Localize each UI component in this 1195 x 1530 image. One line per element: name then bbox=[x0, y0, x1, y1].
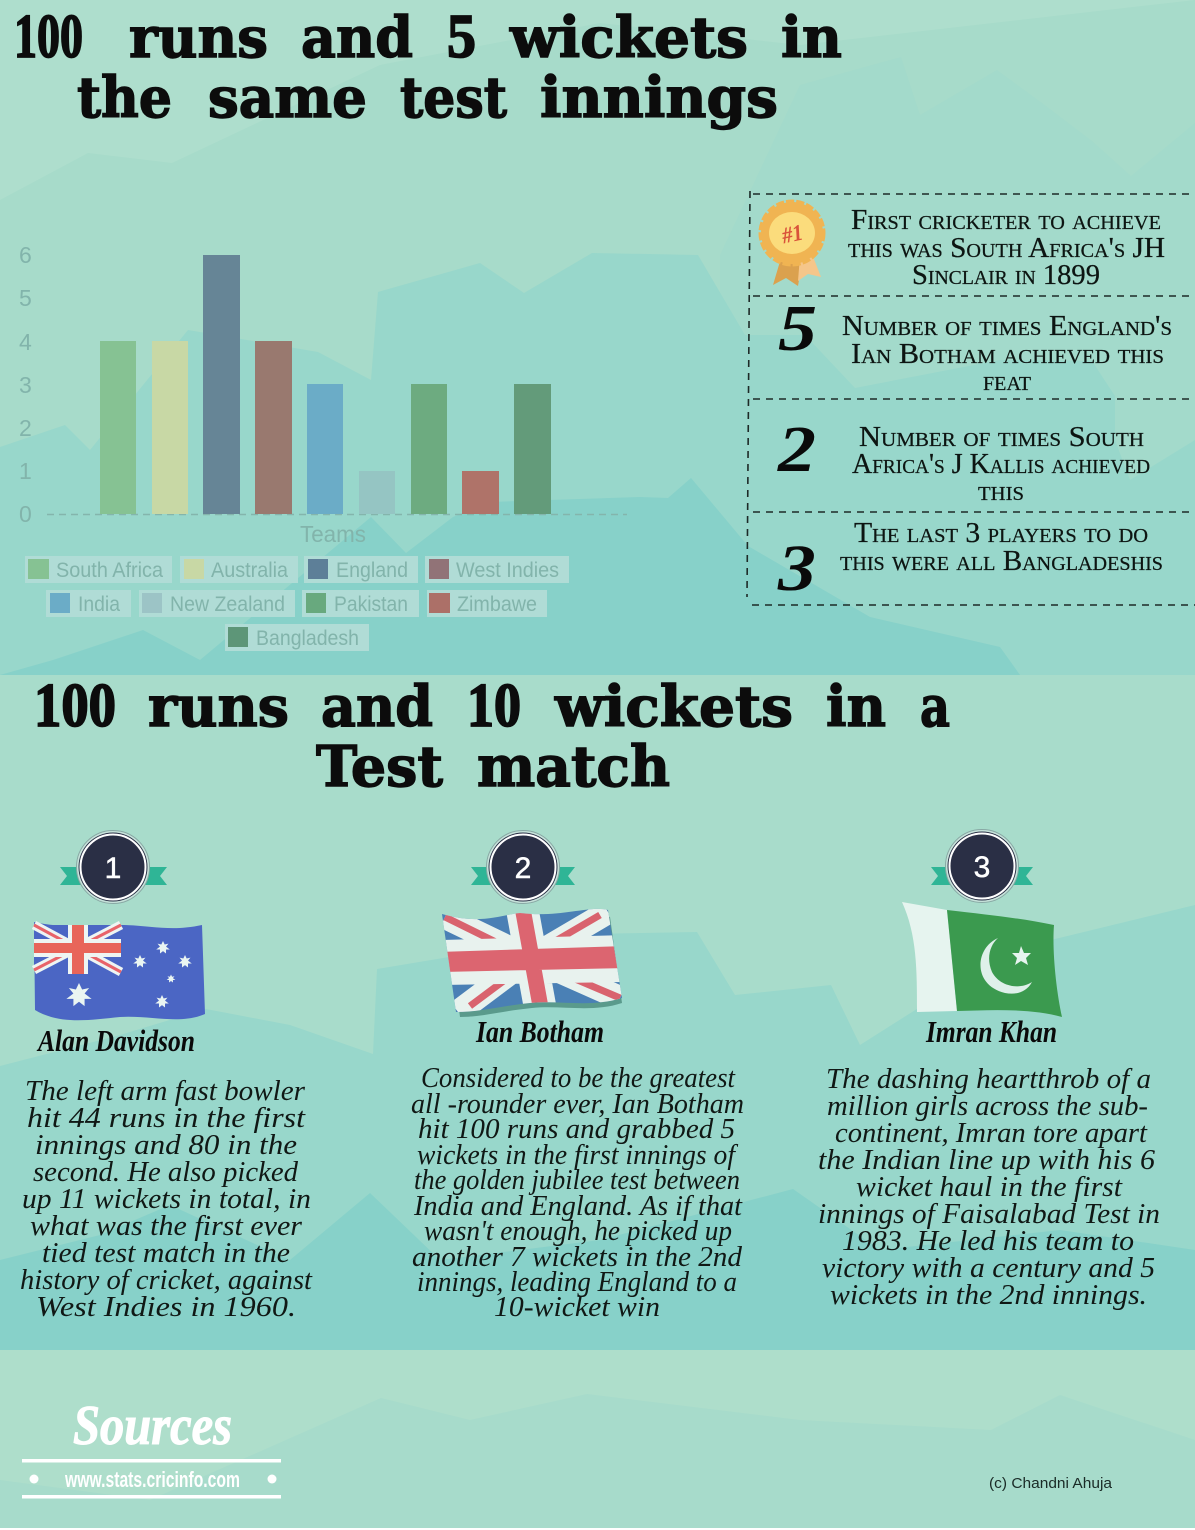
title: 100 runs and 10 wickets: and bbox=[321, 674, 433, 740]
fact: Botham: Ian Botham achieved this bbox=[851, 338, 1164, 370]
flag: Australia bbox=[34, 922, 205, 1020]
bio: Alan Davidson: history of cricket, against bbox=[20, 1264, 313, 1296]
name: Alan Davidson: Alan Davidson bbox=[36, 1023, 195, 1058]
bio: Alan Davidson: The left arm fast bowler bbox=[25, 1075, 306, 1107]
legend: South Africa bbox=[56, 559, 163, 582]
badge 3 bbox=[931, 830, 1033, 902]
title: 100 runs and 5 wickets bbox=[14, 3, 842, 131]
dashed dividers bbox=[747, 191, 1195, 605]
bar chart: achievements by team bbox=[19, 242, 627, 651]
bio: Ian Botham bbox=[411, 1062, 744, 1323]
source rules and url: www.stats.cricinfo.com bbox=[64, 1467, 240, 1492]
icon: medal #1: #1 bbox=[779, 220, 805, 249]
bio: Ian Botham: innings, leading England to a bbox=[417, 1266, 737, 1298]
badge 2 bbox=[471, 830, 575, 904]
bio: Imran Khan: continent, Imran tore apart bbox=[835, 1117, 1148, 1149]
title: 100 runs and 10 wickets: in bbox=[826, 674, 886, 740]
bio: Alan Davidson: what was the first ever bbox=[30, 1210, 303, 1242]
legend: Pakistan bbox=[334, 593, 408, 616]
title: 100 runs and 5 wickets: same bbox=[208, 65, 367, 131]
fact: Bangladeshis: The last 3 players to do bbox=[854, 517, 1148, 549]
title: 100 runs and 10 wickets: a bbox=[920, 674, 950, 740]
title: 100 runs and 5 wickets: 100 bbox=[14, 3, 83, 71]
bio: Imran Khan: million girls across the sub- bbox=[827, 1090, 1148, 1122]
fact: Kallis: this bbox=[978, 475, 1024, 507]
y axis labels: 2 bbox=[19, 415, 32, 441]
number 2: 2 bbox=[777, 413, 816, 486]
bio: Alan Davidson: tied test match in the bbox=[42, 1237, 290, 1269]
y axis labels bbox=[19, 242, 32, 527]
fact: Kallis: Africa's J Kallis achieved bbox=[852, 448, 1150, 480]
bio: Ian Botham: hit 100 runs and grabbed 5 bbox=[418, 1113, 735, 1145]
badge 2: 2 bbox=[515, 852, 531, 885]
title: 100 runs and 5 wickets: wickets bbox=[509, 5, 748, 71]
y axis labels: 5 bbox=[19, 285, 32, 311]
bio: Imran Khan: the Indian line up with his 6 bbox=[818, 1144, 1156, 1176]
bio: Imran Khan: wicket haul in the first bbox=[856, 1171, 1123, 1203]
title: 100 runs and 5 wickets: 5 bbox=[447, 3, 476, 71]
bio: Imran Khan: victory with a century and 5 bbox=[822, 1252, 1155, 1284]
sources heading: Sources bbox=[73, 1395, 232, 1457]
name: Ian Botham: Ian Botham bbox=[475, 1014, 604, 1049]
baseline bbox=[47, 514, 627, 516]
sources block bbox=[22, 1395, 281, 1498]
bio: Ian Botham: wasn't enough, he picked up bbox=[424, 1215, 732, 1247]
bio: Ian Botham: another 7 wickets in the 2nd bbox=[412, 1241, 742, 1273]
bio: Imran Khan bbox=[818, 1063, 1160, 1311]
y axis labels: 0 bbox=[19, 501, 32, 527]
legend bbox=[25, 556, 569, 651]
fact: Botham: feat bbox=[983, 365, 1031, 397]
flag: United Kingdom bbox=[440, 905, 625, 1017]
bars bbox=[100, 255, 551, 514]
badge 1 bbox=[60, 830, 167, 904]
title: 100 runs and 10 wickets: 10 bbox=[467, 672, 521, 740]
badge 3: 3 bbox=[974, 851, 990, 884]
title: 100 runs and 10 wickets: runs bbox=[148, 674, 289, 740]
bio: Ian Botham: India and England. As if that bbox=[413, 1190, 743, 1222]
fact: first cricketer: this was South Africa's JH bbox=[848, 232, 1165, 264]
y axis labels: 3 bbox=[19, 372, 32, 398]
bio: Imran Khan: wickets in the 2nd innings. bbox=[830, 1279, 1147, 1311]
number 5: 5 bbox=[778, 292, 817, 365]
bio: Imran Khan: 1983. He led his team to bbox=[842, 1225, 1134, 1257]
fact: first cricketer bbox=[848, 204, 1165, 291]
bio: Ian Botham: wickets in the first innings of bbox=[417, 1139, 739, 1171]
title: 100 runs and 10 wickets: match bbox=[477, 734, 670, 800]
number 3: 3 bbox=[777, 532, 816, 605]
y axis labels: 1 bbox=[19, 458, 32, 484]
bio: Ian Botham: the golden jubilee test between bbox=[414, 1164, 740, 1196]
y axis labels: 6 bbox=[19, 242, 32, 268]
bio: Alan Davidson: second. He also picked bbox=[33, 1156, 298, 1188]
icon: medal #1 bbox=[761, 202, 823, 286]
bio: Alan Davidson: hit 44 runs in the first bbox=[27, 1102, 306, 1134]
legend: India bbox=[78, 593, 120, 616]
title: 100 runs and 5 wickets: test bbox=[400, 65, 507, 131]
legend: West Indies bbox=[456, 559, 559, 582]
fact: Bangladeshis: this were all Bangladeshis bbox=[840, 545, 1163, 577]
bio: Imran Khan: The dashing heartthrob of a bbox=[826, 1063, 1151, 1095]
bio: Alan Davidson: West Indies in 1960. bbox=[36, 1291, 296, 1323]
title: 100 runs and 10 wickets bbox=[34, 672, 950, 800]
title: 100 runs and 5 wickets: innings bbox=[540, 65, 778, 131]
fact: Botham bbox=[842, 310, 1172, 397]
fact: Bangladeshis bbox=[840, 517, 1163, 577]
bio: Ian Botham: Considered to be the greatest bbox=[421, 1062, 736, 1094]
title: 100 runs and 5 wickets: runs bbox=[129, 5, 268, 71]
bio: Ian Botham: 10-wicket win bbox=[494, 1291, 660, 1323]
source rules and url bbox=[22, 1459, 281, 1498]
fact: Kallis bbox=[852, 421, 1150, 507]
fact: first cricketer: First cricketer to achieve bbox=[851, 204, 1161, 236]
badge 1: 1 bbox=[105, 852, 121, 885]
y axis labels: 4 bbox=[19, 329, 32, 355]
legend: Australia bbox=[211, 559, 288, 582]
title: 100 runs and 10 wickets: Test bbox=[316, 734, 443, 800]
legend: New Zealand bbox=[170, 593, 285, 616]
title: 100 runs and 5 wickets: and bbox=[301, 5, 413, 71]
fact: first cricketer: Sinclair in 1899 bbox=[912, 259, 1100, 291]
legend: England bbox=[336, 559, 408, 582]
bio: Alan Davidson bbox=[20, 1075, 313, 1323]
title: 100 runs and 10 wickets: wickets bbox=[554, 674, 793, 740]
bio: Ian Botham: all -rounder ever, Ian Botham bbox=[411, 1088, 744, 1120]
title: 100 runs and 10 wickets: 100 bbox=[34, 672, 116, 740]
panel: facts bbox=[747, 191, 1195, 605]
flag: Pakistan bbox=[902, 902, 1062, 1017]
legend: Bangladesh bbox=[256, 627, 359, 650]
fact: Kallis: Number of times South bbox=[859, 421, 1144, 453]
bio: Alan Davidson: innings and 80 in the bbox=[35, 1129, 297, 1161]
legend: Zimbawe bbox=[457, 593, 537, 616]
bio: Alan Davidson: up 11 wickets in total, in bbox=[22, 1183, 311, 1215]
fact: Botham: Number of times England's bbox=[842, 310, 1172, 342]
title: 100 runs and 5 wickets: the bbox=[77, 65, 172, 131]
x axis title: Teams bbox=[300, 521, 366, 547]
title: 100 runs and 5 wickets: in bbox=[781, 5, 842, 71]
credit: (c) Chandni Ahuja bbox=[989, 1476, 1113, 1492]
name: Imran Khan: Imran Khan bbox=[925, 1014, 1057, 1049]
bio: Imran Khan: innings of Faisalabad Test in bbox=[818, 1198, 1160, 1230]
